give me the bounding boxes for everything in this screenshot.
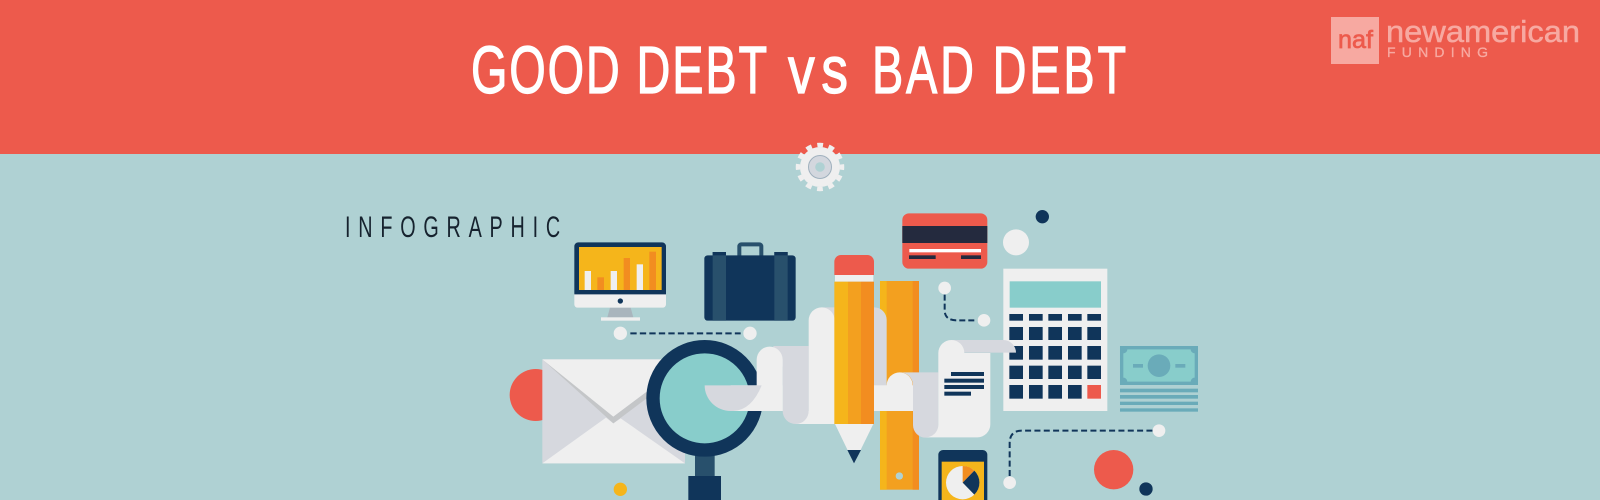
title	[471, 32, 1126, 108]
icon: envelope	[542, 359, 685, 463]
white dot	[1003, 229, 1029, 255]
dashed connector	[1003, 424, 1165, 489]
icon: gear	[798, 145, 842, 189]
navy dot	[1139, 482, 1153, 496]
title: GOOD DEBT	[471, 34, 767, 108]
dashed connector	[614, 327, 757, 340]
icon: money stack	[1120, 346, 1198, 412]
title: BAD DEBT	[872, 34, 1126, 108]
logo: New American Funding	[1331, 14, 1580, 64]
logo: New American Funding: newamerican	[1386, 14, 1580, 49]
red circle	[510, 369, 562, 421]
right illustration cluster	[705, 210, 1198, 500]
icon: ruler	[880, 281, 919, 490]
title: vs	[788, 32, 848, 107]
yellow dot	[614, 483, 627, 496]
icon: briefcase	[704, 244, 796, 321]
logo: New American Funding: FUNDING	[1387, 44, 1488, 60]
icon: calculator	[1003, 269, 1107, 411]
left illustration cluster	[510, 242, 796, 500]
icon: pencil	[834, 255, 874, 463]
logo: New American Funding: naf	[1338, 26, 1373, 54]
scroll sheet with text lines	[926, 340, 990, 437]
icon: paper scroll	[705, 307, 938, 438]
scroll banner over calculator	[952, 340, 1016, 353]
header band	[0, 0, 1600, 154]
red circle	[1094, 450, 1133, 489]
label: infographic: INFOGRAPHIC	[345, 211, 560, 244]
icon: tablet with pie chart	[938, 450, 987, 500]
icon: credit card	[902, 213, 987, 269]
navy dot	[1036, 210, 1049, 223]
dashed connector	[938, 282, 990, 327]
icon: monitor	[574, 242, 666, 321]
icon: magnifying glass	[653, 347, 756, 500]
